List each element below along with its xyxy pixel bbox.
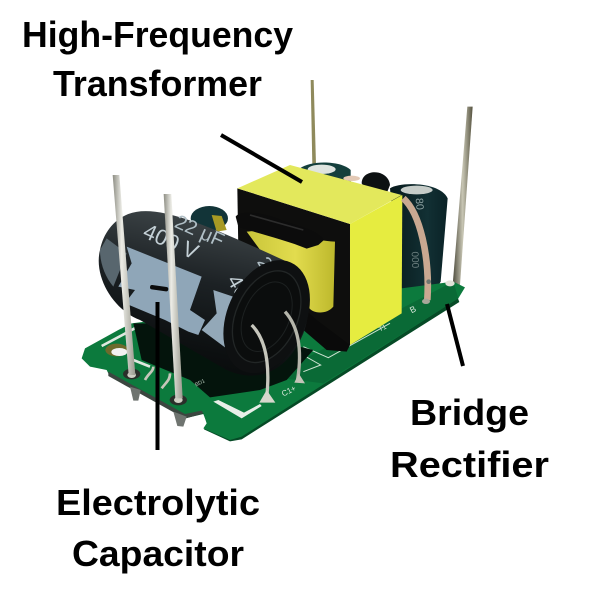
capacitor printed text: 22 — [252, 254, 281, 283]
back green capacitor — [300, 163, 360, 182]
shadow under capacitor — [133, 323, 313, 397]
transformer winding — [247, 231, 335, 313]
black inductor — [362, 172, 390, 193]
green circuit board: T1 — [378, 324, 388, 333]
green circuit board: C1+ — [280, 384, 298, 398]
solder joints and front pins — [113, 175, 187, 405]
capacitor printed text: 40 — [222, 271, 254, 302]
capacitor leads — [252, 325, 268, 398]
metal header strip — [108, 372, 203, 419]
capacitor printed text: 22 μF — [171, 211, 227, 252]
leader line: bridge rectifier — [447, 304, 463, 366]
label: Bridge Rectifier: Rectifier — [390, 444, 549, 485]
right dark teal capacitor: 000 — [409, 251, 420, 269]
silk text BD1: BD1 — [194, 378, 206, 388]
capacitor end cap — [207, 246, 327, 387]
illustration: power module circuit board — [82, 80, 473, 441]
wire loop — [403, 198, 428, 300]
title: High-Frequency Transformer — [22, 14, 293, 104]
solder points right — [422, 280, 455, 304]
title: High-Frequency Transformer: Transformer — [53, 63, 262, 104]
transformer top clamp — [236, 213, 324, 249]
under-board solder pins — [130, 387, 187, 427]
label: Bridge Rectifier: Bridge — [410, 392, 529, 433]
small teal capacitor — [191, 206, 228, 232]
label: Electrolytic Capacitor: Capacitor — [72, 533, 244, 574]
capacitor printed text: 400 V — [140, 218, 203, 265]
capacitor printed text — [140, 211, 281, 302]
label: Electrolytic Capacitor — [56, 482, 260, 574]
label: Bridge Rectifier — [390, 392, 549, 485]
title: High-Frequency Transformer: High-Frequency — [22, 14, 293, 55]
green circuit board: B — [408, 303, 418, 315]
capacitor sleeve marking — [118, 247, 205, 335]
right tall pin — [453, 107, 473, 285]
right dark teal capacitor — [390, 184, 448, 296]
right dark teal capacitor: 80 — [413, 198, 426, 210]
transformer — [236, 165, 402, 352]
label: Electrolytic Capacitor: Electrolytic — [56, 482, 260, 523]
back pin — [311, 80, 316, 165]
big electrolytic capacitor — [99, 211, 327, 403]
leader line: electrolytic capacitor — [156, 302, 160, 450]
green circuit board — [82, 282, 465, 441]
leader line: transformer — [221, 135, 302, 182]
